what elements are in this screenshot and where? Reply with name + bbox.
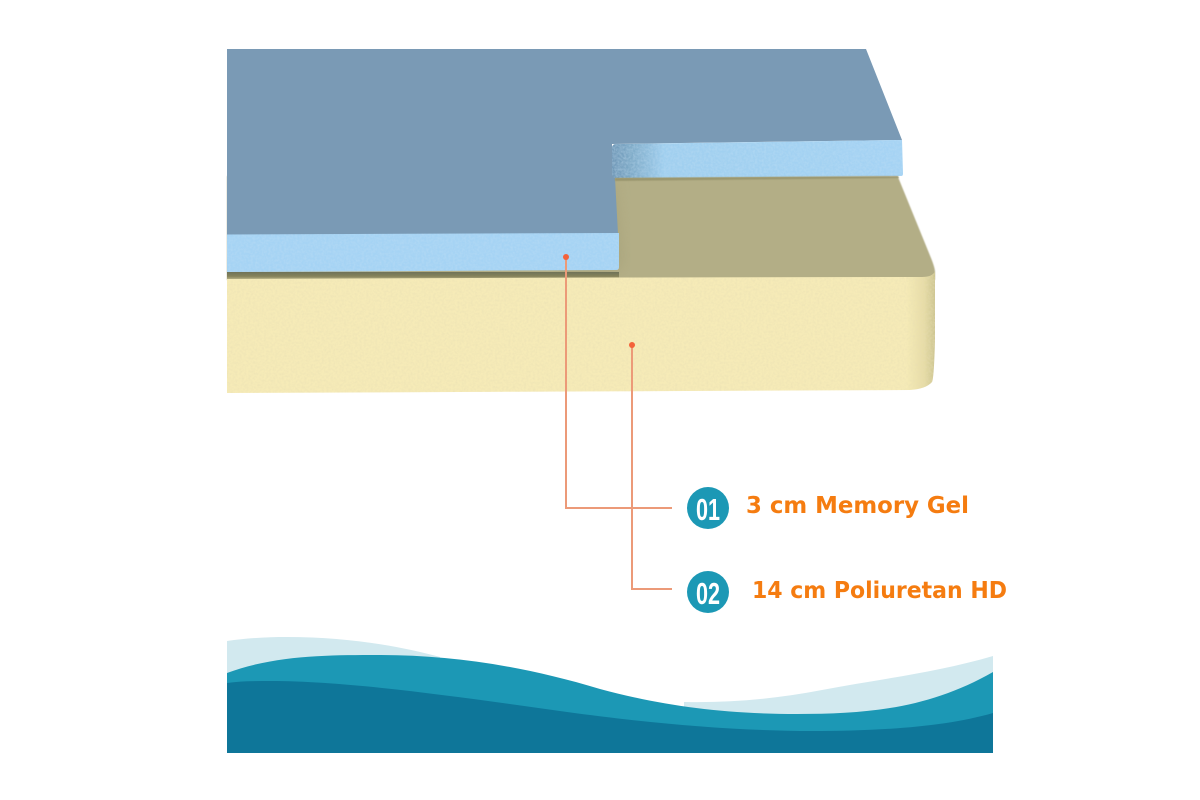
callout 02 badge [687, 571, 729, 613]
callout 02 label: 14 cm Poliuretan HD [752, 578, 1007, 604]
blue layer top surface [227, 49, 902, 236]
callout 01 label: 3 cm Memory Gel [746, 493, 969, 519]
panel: memory gel layer [227, 49, 903, 272]
blue layer front face, right section [612, 140, 903, 178]
light wave [227, 637, 993, 753]
shadow cast by the blue layer on the foam [560, 182, 624, 276]
yellow layer shadow strip under blue [227, 272, 619, 279]
callout 01 badge [687, 487, 729, 529]
callout leader line 02 [629, 342, 672, 589]
callout leader line 01 [563, 254, 672, 508]
decorative waves footer [227, 637, 993, 753]
yellow layer front face [227, 271, 935, 393]
callout 02 badge: 02 [696, 576, 720, 611]
callout 01 badge: 01 [696, 492, 720, 527]
middle wave [227, 655, 993, 753]
panel: polyurethan foam layer [227, 176, 935, 393]
dark wave [227, 681, 993, 753]
yellow layer top surface [227, 176, 935, 280]
blue layer front face, left section [227, 233, 619, 272]
shadow under right section [615, 176, 899, 181]
